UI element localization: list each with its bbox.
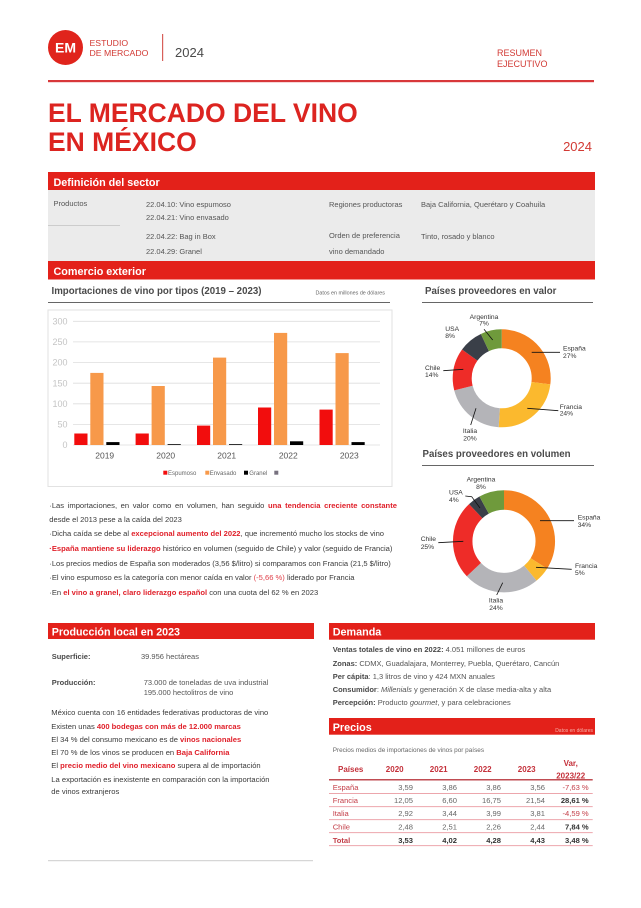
heading: países proveedores en volumen: Países proveedores en volumen — [422, 449, 571, 460]
row: Chile: 2,51 — [442, 823, 457, 832]
donut chart: valor: 8% — [445, 333, 455, 340]
heading: importaciones: Datos en millones de dólares — [315, 290, 385, 296]
panel: precios — [329, 718, 595, 846]
donut chart: volumen: USA — [449, 490, 463, 496]
demand text: Ventas totales de vino en 2022: 4.051 millones de euros — [333, 645, 526, 654]
sector table: Regiones productoras — [329, 200, 403, 209]
heading: producción local: Producción local en 2023 — [52, 626, 180, 638]
sector table: Orden de preferencia — [329, 231, 401, 240]
heading: demanda — [329, 623, 595, 640]
row: Chile — [333, 823, 589, 832]
header year — [162, 34, 204, 61]
y axis labels: 200 — [52, 358, 68, 368]
row: Italia: 3,81 — [530, 809, 545, 818]
table: precios medios: Var, — [564, 759, 578, 768]
heading: precios: Datos en dólares — [555, 728, 593, 734]
row: Francia: 12,05 — [394, 796, 413, 805]
donut chart: valor: Chile — [425, 365, 441, 372]
donut chart: valor — [425, 314, 586, 442]
row: España: España — [333, 783, 359, 792]
sector table — [48, 190, 595, 261]
heading: importaciones — [48, 286, 390, 303]
donut chart: valor: 14% — [425, 372, 438, 379]
row: Italia: 2,92 — [398, 809, 413, 818]
sector table: 22.04.21: Vino envasado — [146, 213, 229, 222]
logo text: DE MERCADO — [90, 48, 149, 58]
heading: comercio exterior — [48, 261, 595, 280]
row: Francia: 16,75 — [482, 796, 501, 805]
production figures: 195.000 hectolitros de vino — [144, 688, 233, 697]
row: Francia — [333, 796, 589, 805]
heading: producción local — [48, 623, 314, 639]
row: Italia: Italia — [333, 809, 350, 818]
sector table: 22.04.10: Vino espumoso — [146, 200, 231, 209]
production figures: Producción: — [52, 678, 95, 687]
demand text: Per cápita: 1,3 litros de vino y 424 MXN anuales — [333, 672, 495, 681]
donut chart: valor: España — [563, 346, 586, 352]
y axis labels: 0 — [62, 440, 68, 450]
donut chart: valor: Argentina — [470, 314, 499, 321]
row: España: -7,63 % — [563, 783, 589, 792]
table: precios medios: Países — [338, 765, 364, 774]
row: Total: 4,43 — [530, 836, 545, 845]
logo: EM circle — [48, 30, 83, 65]
y axis labels: 300 — [52, 316, 68, 326]
row: España: 3,56 — [530, 783, 545, 792]
row: Italia: 3,44 — [442, 809, 457, 818]
table caption: Precios medios de importaciones de vinos por países — [333, 747, 484, 754]
bar chart: importaciones por tipos — [48, 310, 392, 486]
demand text: Percepción: Producto gourmet, y para celebraciones — [333, 698, 511, 707]
demand text: Consumidor: Millenials y generación X de clase media-alta y alta — [333, 685, 552, 694]
x axis labels — [95, 451, 359, 461]
x axis labels: 2020 — [156, 451, 175, 461]
x axis labels: 2022 — [279, 451, 298, 461]
y axis labels: 250 — [52, 337, 68, 347]
panel: demanda — [329, 623, 595, 707]
text block: importaciones highlights: ·El vino espumoso es la categoría con menor caída en valor (-5,66 %) liderado por Francia — [49, 573, 355, 582]
production notes: de vinos extranjeros — [51, 787, 119, 796]
production notes: El 70 % de los vinos se producen en Baja California — [51, 748, 230, 757]
production notes: El 34 % del consumo mexicano es de vinos nacionales — [51, 735, 241, 744]
legend: Espumoso — [168, 471, 197, 477]
x axis labels: 2019 — [95, 451, 114, 461]
heading: importaciones: Importaciones de vino por tipos (2019 – 2023) — [52, 286, 261, 297]
row: Italia: -4,59 % — [563, 809, 589, 818]
executive summary tag: EJECUTIVO — [497, 59, 548, 69]
donut chart: volumen: Argentina — [467, 476, 496, 484]
row: Francia: Francia — [333, 796, 359, 805]
heading: comercio exterior: Comercio exterior — [54, 266, 147, 278]
x axis labels: 2023 — [340, 451, 359, 461]
heading: precios: Precios — [333, 722, 372, 734]
legend — [163, 471, 278, 477]
production notes: El precio medio del vino mexicano supera al de importación — [51, 761, 261, 770]
row: España: 3,59 — [398, 783, 413, 792]
sector table: Tinto, rosado y blanco — [421, 232, 495, 241]
donut chart: volumen: 34% — [578, 522, 591, 529]
text block: importaciones highlights: ·Dicha caída se debe al excepcional aumento del 2022, que incrementó mucho los stocks de vino — [49, 529, 384, 538]
donut chart: volumen: 8% — [476, 484, 486, 491]
production notes: México cuenta con 16 entidades federativas productoras de vino — [51, 708, 268, 717]
table: precios medios: 2023 — [518, 765, 536, 774]
donut chart: valor: 27% — [563, 353, 576, 360]
y axis labels: 50 — [57, 420, 68, 430]
row: Total: Total — [333, 836, 350, 845]
text block: importaciones highlights: ·España mantiene su liderazgo histórico en volumen (seguido de Chile) y valor (seguido de Francia) — [49, 544, 393, 553]
donut chart: valor: Italia — [463, 428, 477, 435]
row: Total: 3,53 — [398, 836, 413, 845]
donut chart: valor: 20% — [463, 436, 477, 442]
bars: espumoso — [74, 408, 333, 445]
legend: Envasado — [210, 471, 237, 477]
donut chart: volumen: Chile — [421, 536, 436, 543]
demand text: Zonas: CDMX, Guadalajara, Monterrey, Puebla, Querétaro, Cancún — [333, 659, 559, 668]
donut chart: valor: 7% — [479, 320, 489, 328]
title year: 2024 — [563, 139, 592, 154]
production figures: 39.956 hectáreas — [141, 652, 199, 661]
donut chart: valor: Francia — [560, 404, 582, 411]
row: Chile: 7,84 % — [565, 823, 589, 832]
header year: 2024 — [175, 45, 204, 60]
production figures: Superficie: — [52, 652, 90, 661]
heading: definición del sector: Definición del sector — [54, 177, 160, 189]
donut chart: volumen: 25% — [421, 544, 434, 551]
row: España: 3,86 — [486, 783, 501, 792]
executive summary tag: RESUMEN — [497, 48, 542, 58]
sector table: 22.04.29: Granel — [146, 247, 202, 256]
production figures — [52, 652, 269, 697]
sector table: 22.04.22: Bag in Box — [146, 232, 216, 241]
y axis labels: 100 — [52, 399, 68, 409]
text block: importaciones highlights — [49, 501, 397, 597]
logo text: ESTUDIO — [90, 38, 128, 48]
table: precios medios: 2021 — [430, 765, 448, 774]
heading: precios — [329, 718, 595, 735]
table: precios medios: 2023/22 — [556, 772, 586, 780]
title: EL MERCADO DEL VINO — [48, 98, 358, 128]
text block: importaciones highlights: ·Los precios medios de España son moderados (3,56 $/litro) si comparamos con Francia (21,5 $/litro) — [49, 559, 391, 568]
header — [48, 30, 548, 69]
row: Chile: Chile — [333, 823, 350, 832]
row: Total: 3,48 % — [565, 836, 589, 845]
heading: países proveedores en valor: Países proveedores en valor — [425, 286, 557, 297]
production figures: 73.000 de toneladas de uva industrial — [144, 678, 269, 687]
row: Francia: 6,60 — [442, 796, 457, 805]
row: Italia — [333, 809, 589, 818]
sector table: Productos — [54, 199, 88, 208]
row: Total: 4,02 — [442, 836, 457, 845]
demand text — [333, 645, 559, 707]
row: Total: 4,28 — [486, 836, 501, 845]
donut chart: volumen: Francia — [575, 563, 598, 570]
logo: EM circle: EM — [55, 40, 76, 56]
row: Chile: 2,26 — [486, 823, 501, 832]
sector table: Baja California, Querétaro y Coahuila — [421, 200, 546, 209]
donut chart: volumen — [421, 476, 601, 612]
row: Chile: 2,48 — [398, 823, 413, 832]
x axis labels: 2021 — [217, 451, 236, 461]
table: precios medios — [329, 759, 593, 846]
table: precios medios: 2022 — [474, 765, 492, 774]
production notes: Existen unas 400 bodegas con más de 12.000 marcas — [51, 722, 241, 731]
table: precios medios: 2020 — [386, 765, 404, 774]
production notes — [51, 708, 270, 796]
text block: importaciones highlights: ·En el vino a granel, claro liderazgo español con una cuota del 62 % en 2023 — [49, 588, 318, 597]
donut chart: volumen: 5% — [575, 570, 585, 577]
panel: producción local — [48, 623, 314, 861]
bars: envasado — [90, 333, 349, 445]
heading: demanda: Demanda — [333, 627, 382, 639]
text block: importaciones highlights: ·Las importaciones, en valor como en volumen, han seguido una tendencia creciente constante — [49, 501, 397, 510]
heading: definición del sector — [48, 172, 595, 190]
row: Francia: 28,61 % — [561, 796, 589, 805]
row: España: 3,86 — [442, 783, 457, 792]
title: EN MÉXICO — [48, 127, 197, 157]
legend: Granel — [249, 471, 267, 477]
row: Chile: 2,44 — [530, 823, 545, 832]
donut chart: volumen: 4% — [449, 497, 459, 504]
row: Francia: 21,54 — [526, 796, 545, 805]
y axis labels: 150 — [52, 378, 68, 388]
donut chart: valor: 24% — [560, 410, 573, 418]
row: Total — [333, 836, 589, 845]
text block: importaciones highlights: desde el 2013 pese a la caída del 2023 — [49, 515, 182, 524]
donut chart: valor: USA — [445, 326, 460, 333]
donut chart: volumen: Italia — [489, 598, 503, 604]
panel: definición del sector — [48, 172, 595, 261]
row: España — [333, 783, 589, 792]
bars: granel — [106, 441, 365, 445]
sector table: vino demandado — [329, 247, 384, 256]
row: Italia: 3,99 — [486, 809, 501, 818]
donut chart: volumen: España — [578, 514, 601, 522]
y axis labels — [52, 316, 68, 450]
production notes: La exportación es inexistente en comparación con la importación — [51, 775, 270, 784]
donut chart: volumen: 24% — [489, 605, 503, 612]
